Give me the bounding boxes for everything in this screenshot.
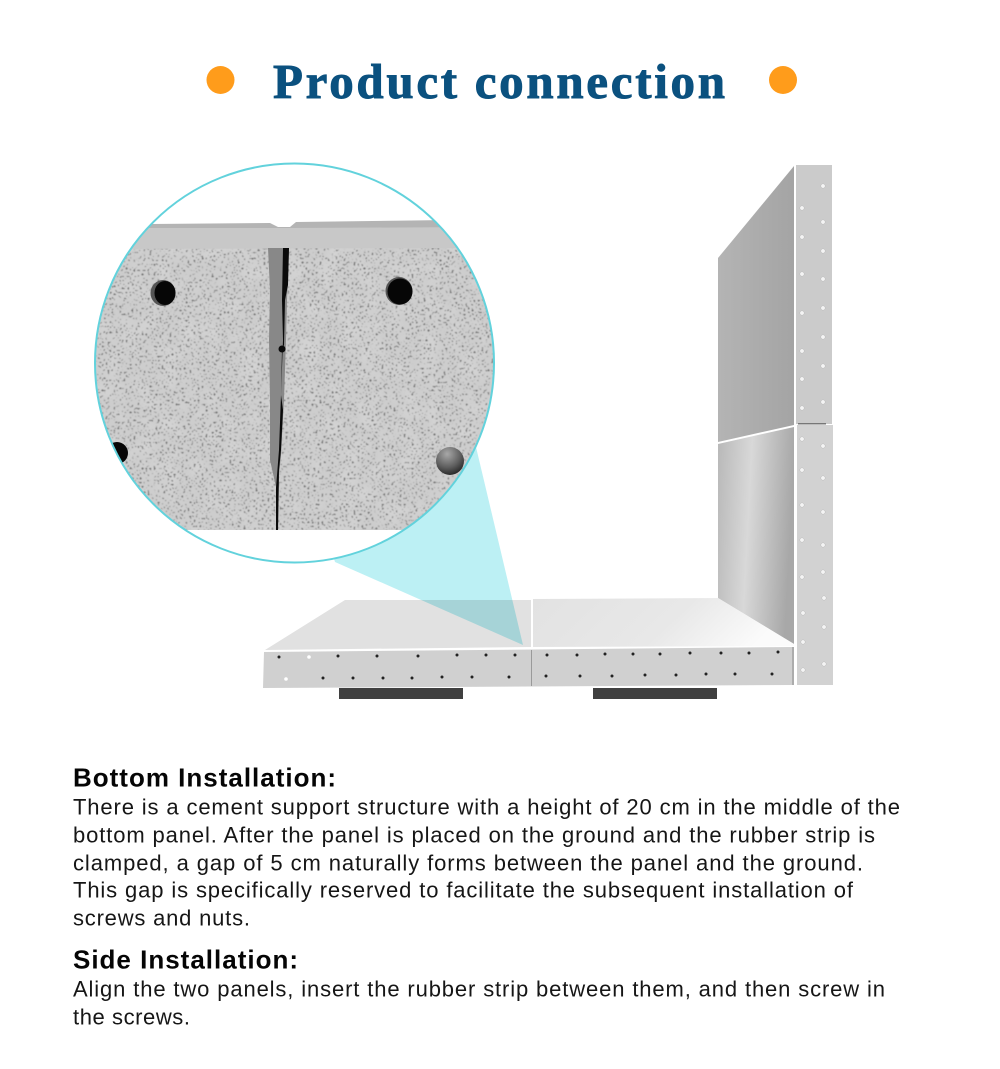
body: side installation: the screws.	[73, 1004, 190, 1030]
body: bottom installation: clamped, a gap of 5 cm naturally forms between the panel and the ground.	[73, 850, 863, 876]
body: side installation: Align the two panels, insert the rubber strip between them, and then screw in	[73, 976, 885, 1002]
body: side installation	[73, 976, 885, 1030]
product illustration: L-shaped panel connection	[263, 165, 833, 699]
panel joint gap	[268, 248, 289, 530]
body: bottom installation: There is a cement support structure with a height of 20 cm in the middle of the	[73, 794, 900, 820]
heading: side installation: Side Installation:	[73, 944, 298, 974]
floor panel right	[533, 598, 794, 647]
heading: Product connection	[273, 54, 725, 109]
right orange dot	[769, 66, 797, 94]
lower side panel face	[718, 427, 794, 644]
front rail	[263, 647, 794, 688]
rubber strip right	[593, 688, 717, 699]
body: bottom installation: screws and nuts.	[73, 906, 250, 930]
floor panel left	[265, 600, 531, 650]
left orange dot	[206, 66, 234, 94]
body: bottom installation: This gap is specifically reserved to facilitate the subsequent installation of	[73, 878, 854, 902]
text block: bottom installation	[73, 762, 900, 930]
title	[206, 54, 797, 109]
magnifier circle	[90, 164, 500, 562]
rubber strip left	[339, 688, 463, 699]
body: bottom installation: bottom panel. After the panel is placed on the ground and the rubber strip is	[73, 822, 875, 848]
text block: side installation	[73, 944, 885, 1030]
upper side panel face	[718, 166, 794, 442]
body: bottom installation	[73, 794, 900, 930]
zoom cone	[300, 447, 523, 645]
concrete close-up	[90, 220, 500, 530]
bolt holes	[106, 277, 464, 475]
side panel flange	[796, 165, 833, 685]
heading: bottom installation: Bottom Installation:	[73, 762, 336, 792]
